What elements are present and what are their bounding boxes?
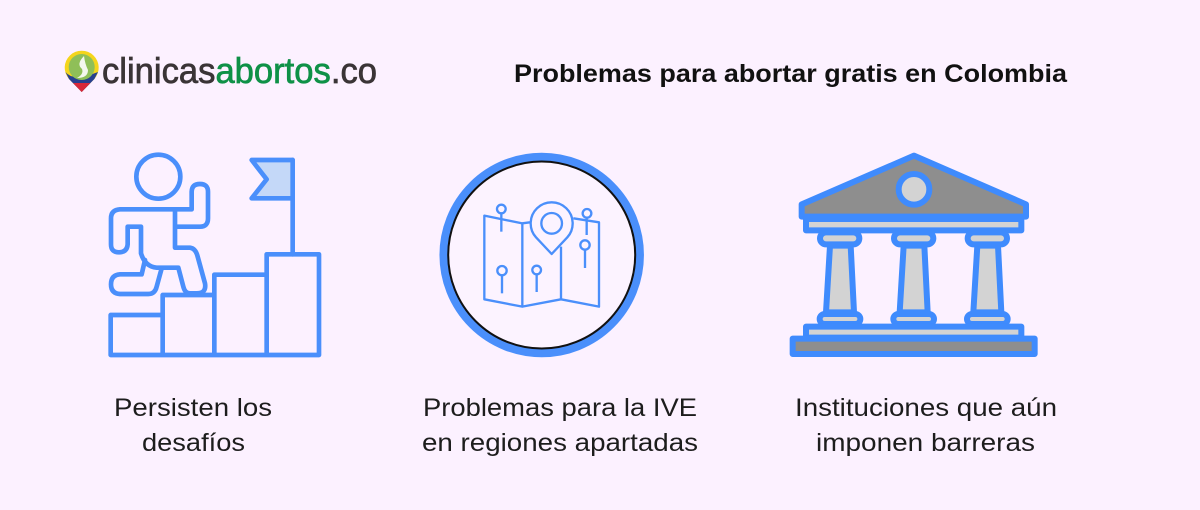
label: persisten los desafios: Persisten los xyxy=(114,394,272,422)
folded map with pins xyxy=(484,202,599,307)
logo wordmark: clinicasabortos.co xyxy=(102,50,377,91)
icon: colombian map pin xyxy=(65,51,99,92)
label: instituciones que aun imponen barreras: imponen barreras xyxy=(816,429,1035,457)
icon: map inside circle xyxy=(444,157,640,353)
icon: person climbing stairs toward flag xyxy=(111,155,319,355)
circle ring xyxy=(444,157,640,353)
label: persisten los desafios: desafíos xyxy=(142,429,245,457)
label: problemas para la ive: Problemas para la IVE xyxy=(423,394,697,422)
title: Problemas para abortar gratis en Colombia xyxy=(514,60,1068,88)
icon: institution building with columns xyxy=(793,156,1035,354)
label: instituciones que aun imponen barreras: Instituciones que aún xyxy=(795,394,1057,422)
label: problemas para la ive: en regiones apartadas xyxy=(422,429,698,457)
logo: clinicasabortos.co xyxy=(65,50,377,92)
